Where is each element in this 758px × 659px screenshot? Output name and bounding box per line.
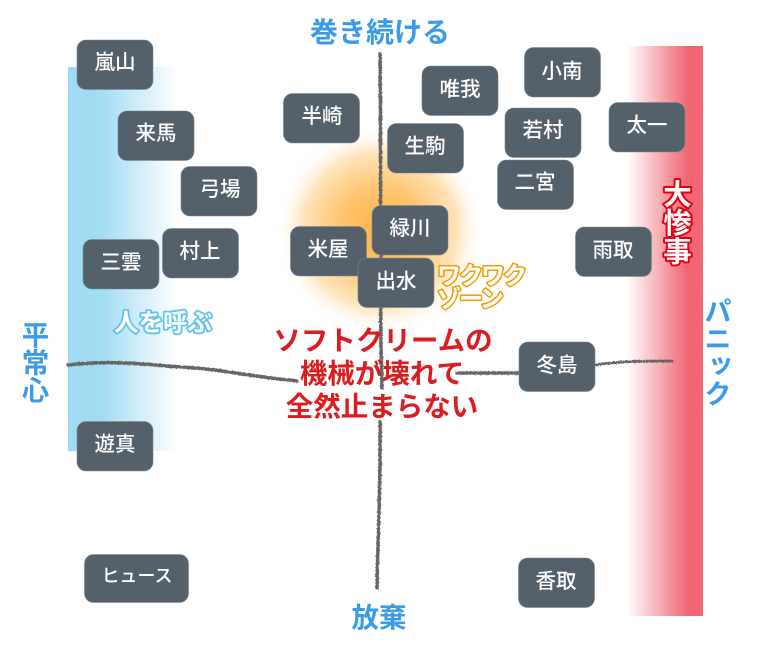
card: 弓場 bbox=[181, 166, 257, 216]
axis label: left: 平常心 bbox=[18, 321, 49, 403]
card: 唯我 bbox=[422, 66, 498, 116]
axis label: right: パニック bbox=[700, 297, 731, 407]
callout: central red message: 全然止まらない bbox=[286, 391, 478, 422]
card: 三雲: 三雲 bbox=[100, 251, 142, 274]
card: 香取 bbox=[518, 558, 594, 608]
axis label: bottom: 放棄 bbox=[352, 602, 406, 633]
card: 来馬: 来馬 bbox=[136, 122, 176, 145]
card: 雨取 bbox=[576, 227, 652, 276]
card: 緑川 bbox=[372, 206, 448, 255]
axis label: top: 巻き続ける bbox=[310, 17, 450, 48]
card: 村上 bbox=[162, 228, 238, 278]
card: 三雲 bbox=[83, 240, 159, 289]
card: ヒュース: ヒュース bbox=[101, 566, 173, 586]
card: 嵐山 bbox=[77, 40, 153, 90]
card: 遊真: 遊真 bbox=[94, 433, 136, 456]
callout: central red message: ソフトクリームの bbox=[273, 325, 493, 356]
card: 半崎: 半崎 bbox=[302, 105, 342, 128]
zone label: calm: 人を呼ぶ bbox=[114, 309, 212, 337]
card: 出水: 出水 bbox=[376, 270, 416, 293]
card: 雨取: 雨取 bbox=[592, 239, 634, 262]
card: 生駒: 生駒 bbox=[404, 135, 446, 158]
zone label: excitement bbox=[437, 263, 525, 313]
card: 遊真 bbox=[77, 422, 153, 471]
zone label: excitement: ゾーン bbox=[437, 286, 503, 313]
card: 唯我: 唯我 bbox=[440, 78, 480, 101]
vertical axis line bbox=[377, 54, 382, 588]
card: 冬島: 冬島 bbox=[536, 354, 578, 377]
panel: excitement zone glow bbox=[276, 126, 484, 334]
card: 嵐山: 嵐山 bbox=[94, 51, 136, 74]
card: 二宮: 二宮 bbox=[514, 171, 556, 194]
panel: calm zone gradient bbox=[68, 67, 178, 451]
callout: central red message bbox=[273, 325, 493, 422]
card: 生駒 bbox=[388, 124, 464, 173]
card: 来馬 bbox=[118, 111, 194, 160]
card: 若村: 若村 bbox=[522, 119, 564, 142]
card: 緑川: 緑川 bbox=[390, 217, 430, 240]
card: 弓場: 弓場 bbox=[200, 178, 240, 201]
card: 太一: 太一 bbox=[626, 114, 668, 137]
card: ヒュース bbox=[84, 554, 188, 602]
card: 太一 bbox=[609, 102, 685, 152]
card: 小南 bbox=[524, 48, 600, 97]
card: 二宮 bbox=[498, 160, 574, 210]
horizontal axis line bbox=[68, 361, 672, 381]
callout: central red message: 機械が壊れて bbox=[300, 358, 464, 389]
zone label: disaster: 大惨事 bbox=[659, 179, 691, 265]
zone label: excitement: ワクワク bbox=[437, 263, 525, 290]
card: 村上: 村上 bbox=[180, 240, 220, 263]
panel: disaster zone gradient bbox=[627, 46, 703, 616]
card: 小南: 小南 bbox=[542, 60, 582, 83]
card: 出水 bbox=[358, 258, 434, 308]
card: 半崎 bbox=[284, 94, 360, 143]
card: 若村 bbox=[505, 108, 581, 158]
card: 米屋: 米屋 bbox=[308, 238, 348, 261]
card: 冬島 bbox=[519, 342, 595, 392]
card: 香取: 香取 bbox=[536, 570, 577, 593]
card: 米屋 bbox=[290, 226, 366, 276]
